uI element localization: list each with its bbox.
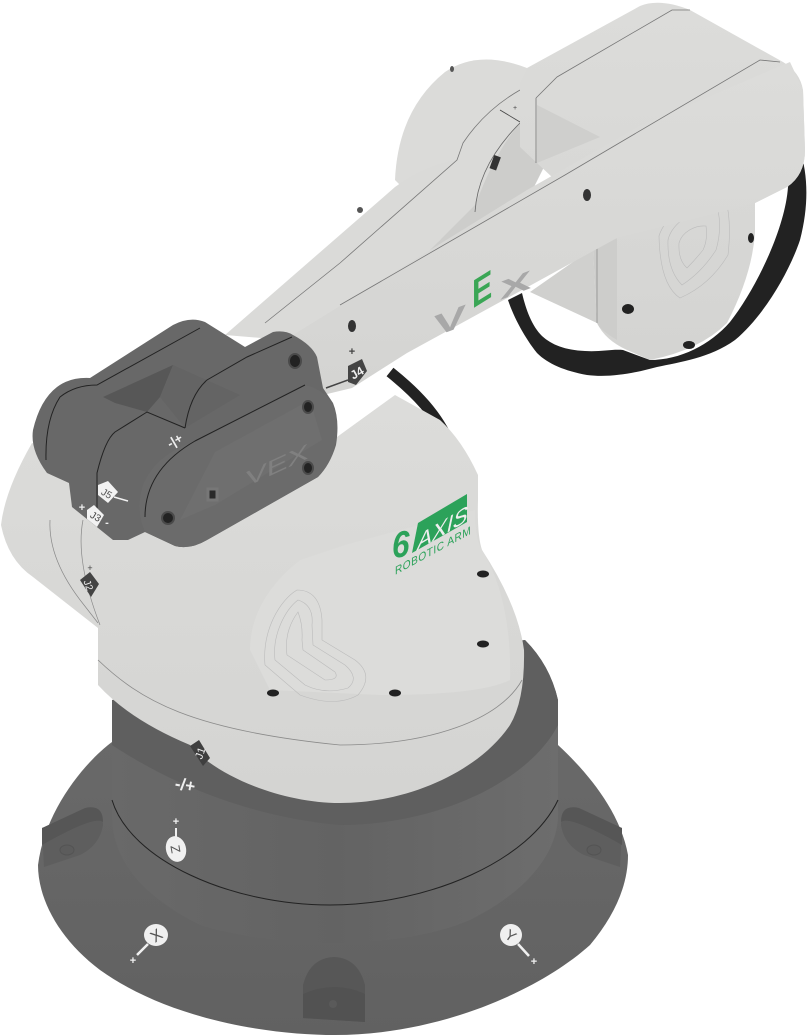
J3 badge: J3 bbox=[88, 510, 103, 525]
logo: VEX on arm: E bbox=[472, 262, 492, 318]
label: Z axis bbox=[163, 816, 189, 864]
joint mark bbox=[265, 590, 366, 702]
label: X axis bbox=[130, 924, 168, 967]
label: X axis: + bbox=[130, 955, 136, 967]
shoulder body bbox=[1, 395, 524, 803]
J2 badge bbox=[80, 563, 99, 597]
mount notch right bbox=[561, 814, 622, 867]
wrist bbox=[33, 320, 337, 547]
logo: 6 AXIS robotic arm: AXIS bbox=[415, 500, 471, 557]
logo: VEX on wrist: VEX bbox=[246, 439, 308, 492]
rear arm link bbox=[225, 66, 545, 345]
mount notch bottom bbox=[303, 957, 365, 1022]
J5 direction mark: -|+ bbox=[164, 430, 186, 451]
label: X axis: X bbox=[148, 926, 166, 946]
screws bbox=[477, 570, 489, 578]
J3 badge bbox=[79, 502, 109, 529]
J4 badge: + bbox=[349, 346, 355, 358]
wrist front plate bbox=[139, 385, 337, 547]
J4 badge bbox=[326, 346, 367, 388]
logo: 6 AXIS robotic arm: ROBOTIC ARM bbox=[395, 525, 471, 578]
screws bbox=[622, 304, 634, 314]
label: -/+: -/+ bbox=[173, 774, 197, 796]
logo: VEX on arm: X bbox=[500, 265, 532, 306]
J2 badge: J2 bbox=[81, 579, 95, 593]
upper housing bbox=[520, 3, 805, 360]
J2 badge: + bbox=[87, 563, 93, 573]
logo: 6 AXIS robotic arm bbox=[392, 494, 471, 578]
rear arm link: + bbox=[513, 105, 517, 112]
J1 badge: J1 bbox=[193, 746, 209, 761]
label: Y axis: Y bbox=[501, 926, 519, 946]
label: Z axis: Z bbox=[167, 844, 184, 854]
joint mark bbox=[659, 197, 729, 298]
J3 badge: + bbox=[79, 502, 85, 514]
J4 badge: J4 bbox=[348, 363, 367, 382]
label: Z axis: + bbox=[173, 816, 179, 828]
screws bbox=[162, 512, 174, 524]
base labels bbox=[130, 774, 537, 968]
cable: lower run bbox=[390, 372, 450, 445]
J5 badge bbox=[98, 481, 128, 503]
label: Y axis: + bbox=[531, 956, 537, 968]
J5 badge: J5 bbox=[99, 487, 114, 502]
J3 badge: - bbox=[105, 517, 109, 529]
label: Y axis bbox=[500, 924, 537, 968]
logo: VEX on arm: V bbox=[434, 298, 466, 343]
logo: 6 AXIS robotic arm: 6 bbox=[392, 524, 410, 567]
flange base plate bbox=[38, 742, 628, 1035]
rear disk bbox=[395, 59, 535, 235]
front arm link bbox=[293, 60, 805, 395]
mount notch left bbox=[42, 814, 103, 867]
cable: rear loop bbox=[508, 150, 806, 376]
wrist recess bbox=[103, 365, 173, 412]
logo: VEX on arm bbox=[434, 262, 532, 343]
J1 badge bbox=[190, 740, 210, 766]
base column bbox=[112, 640, 558, 943]
